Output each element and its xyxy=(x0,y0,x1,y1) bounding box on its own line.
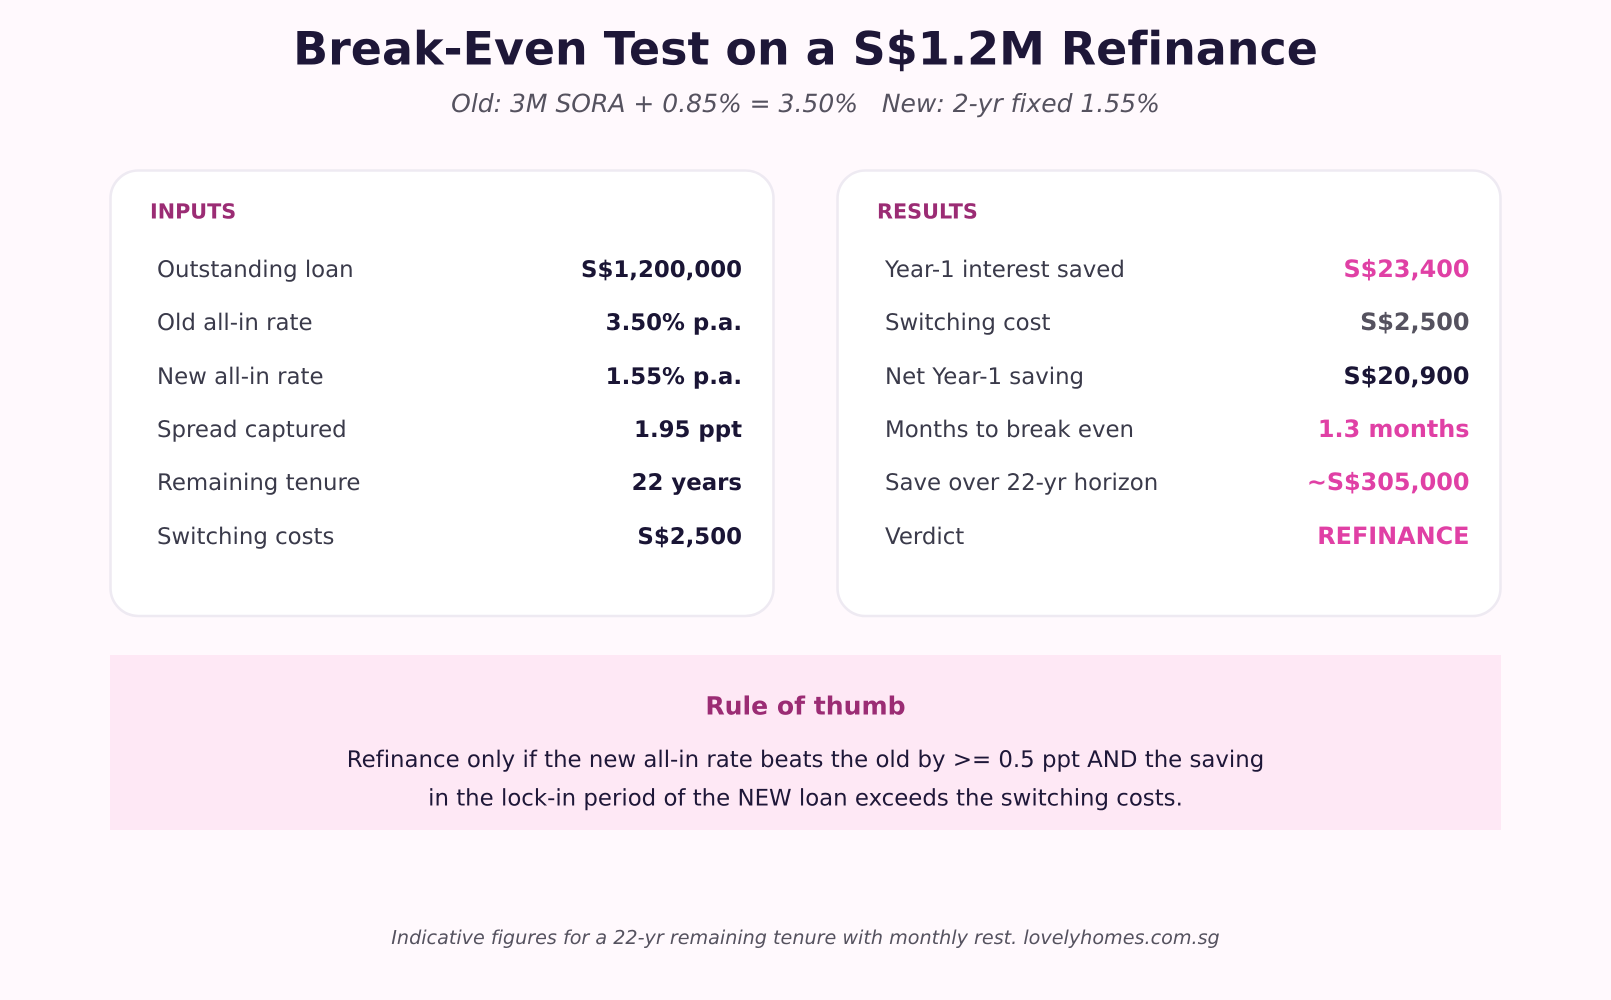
row: new all-in rate: New all-in rate xyxy=(157,364,324,390)
row: spread captured: 1.95 ppt xyxy=(634,417,742,443)
callout text: in the lock-in period of the NEW loan exceeds the switching costs. xyxy=(428,786,1183,812)
callout: rule of thumb xyxy=(110,655,1501,830)
row: switching cost: Switching cost xyxy=(885,310,1051,336)
row: old all-in rate: 3.50% p.a. xyxy=(606,310,742,336)
footer note: Indicative figures for a 22-yr remaining tenure with monthly rest. lovelyhomes.com.sg xyxy=(391,926,1220,949)
row: old all-in rate: Old all-in rate xyxy=(157,310,313,336)
row: switching cost: S$2,500 xyxy=(1360,308,1470,336)
row: year-1 interest saved: S$23,400 xyxy=(1343,255,1470,283)
row: months to break even: Months to break even xyxy=(885,417,1134,443)
row: verdict: REFINANCE xyxy=(1317,522,1470,550)
panel: results xyxy=(838,170,1500,616)
row: net year-1 saving: Net Year-1 saving xyxy=(885,364,1084,390)
row: save over horizon xyxy=(885,468,1470,496)
row: outstanding loan xyxy=(157,257,742,283)
row: spread captured: Spread captured xyxy=(157,417,347,443)
title: Break-Even Test on a S$1.2M Refinance xyxy=(293,22,1318,76)
results heading: RESULTS xyxy=(877,200,978,224)
row: save over horizon: ~S$305,000 xyxy=(1307,468,1470,496)
row: year-1 interest saved: Year-1 interest saved xyxy=(884,257,1125,283)
row: months to break even xyxy=(885,415,1470,443)
row: switching costs: S$2,500 xyxy=(637,524,742,550)
row: switching costs: Switching costs xyxy=(157,524,334,550)
row: verdict: Verdict xyxy=(885,524,964,550)
row: months to break even: 1.3 months xyxy=(1318,415,1470,443)
row: remaining tenure: Remaining tenure xyxy=(157,470,360,496)
callout text: Refinance only if the new all-in rate beats the old by >= 0.5 ppt AND the saving xyxy=(347,747,1264,773)
row: new all-in rate: 1.55% p.a. xyxy=(606,364,742,390)
row: remaining tenure: 22 years xyxy=(632,470,742,496)
row: spread captured xyxy=(157,417,742,443)
inputs heading: INPUTS xyxy=(150,200,236,224)
row: switching costs xyxy=(157,524,742,550)
row: outstanding loan: Outstanding loan xyxy=(157,257,354,283)
row: verdict xyxy=(885,522,1470,550)
row: year-1 interest saved xyxy=(884,255,1470,283)
row: save over horizon: Save over 22-yr horizon xyxy=(885,470,1158,496)
row: switching cost xyxy=(885,308,1470,336)
row: old all-in rate xyxy=(157,310,742,336)
row: net year-1 saving xyxy=(885,362,1470,390)
row: net year-1 saving: S$20,900 xyxy=(1343,362,1470,390)
row: new all-in rate xyxy=(157,364,742,390)
panel: inputs xyxy=(110,170,774,616)
row: outstanding loan: S$1,200,000 xyxy=(581,257,742,283)
callout heading: Rule of thumb xyxy=(705,692,906,720)
row: remaining tenure xyxy=(157,470,742,496)
subtitle: Old: 3M SORA + 0.85% = 3.50% New: 2-yr fixed 1.55% xyxy=(451,89,1160,118)
